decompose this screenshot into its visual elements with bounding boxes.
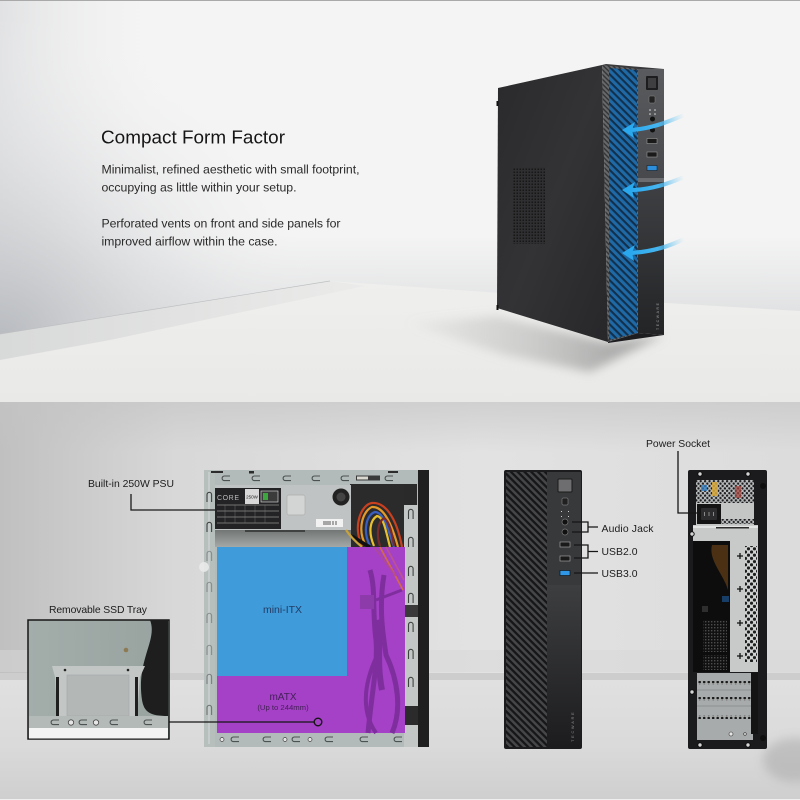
PSU spec label <box>215 488 281 529</box>
PSU barcode <box>316 519 343 527</box>
callout: USB3.0: USB3.0 <box>602 569 638 580</box>
paragraph: perforated vents: Perforated vents on front and side panels for <box>102 216 340 230</box>
corner screws <box>690 472 750 747</box>
metal frame <box>204 470 418 747</box>
mATX label <box>257 692 309 712</box>
case top edge <box>602 64 664 71</box>
open interior <box>693 541 730 672</box>
interior cables <box>711 545 728 590</box>
expansion slot panel <box>697 672 758 740</box>
tray bracket <box>52 666 145 716</box>
background: top room scene <box>0 0 800 402</box>
side panel edge <box>417 470 429 747</box>
callout: built-in PSU: Built-in 250W PSU <box>88 479 174 490</box>
front view of case <box>504 470 582 749</box>
dark cable behind tray <box>141 620 168 716</box>
front ports <box>646 76 658 170</box>
airflow arrow 3 <box>622 239 684 261</box>
rear frame <box>688 470 767 749</box>
thumb screws <box>760 483 766 489</box>
blue airflow highlight <box>609 68 637 340</box>
rear floor shadow <box>763 738 800 782</box>
power supply unit: CORE <box>217 495 239 502</box>
indicator dots <box>561 511 569 517</box>
callout: audio jack <box>572 522 654 535</box>
lower panel <box>547 585 581 748</box>
callout: power socket <box>646 439 710 513</box>
lower front panel <box>638 181 664 335</box>
mATX motherboard zone <box>217 547 405 733</box>
bottom rail hooks <box>220 737 402 742</box>
PSU lower plate <box>696 503 754 525</box>
silver body <box>693 525 758 672</box>
inset photo frame <box>28 620 169 739</box>
callout: USB2.0 <box>574 545 638 558</box>
SSD leader line <box>169 721 314 723</box>
open case interior <box>199 470 429 747</box>
brand mark: TECWARE <box>571 711 575 742</box>
PSU exhaust perforations <box>696 480 754 503</box>
background: bottom studio scene <box>0 402 800 800</box>
PSU cable bundle <box>346 503 402 547</box>
mini-ITX label: mini-ITX <box>263 604 302 616</box>
callout: USB2.0: USB2.0 <box>602 547 638 558</box>
vented front strip <box>602 65 638 342</box>
SSD tray label: Removable SSD Tray <box>49 605 148 616</box>
side panel <box>497 65 608 342</box>
callout: built-in PSU <box>88 479 215 510</box>
rear side perforations <box>745 546 757 662</box>
callout: USB3.0 <box>574 569 638 580</box>
feature text block <box>101 128 360 248</box>
rear cross marks <box>737 553 743 659</box>
brand mark: TECWARE <box>656 301 660 330</box>
tray screw <box>124 648 128 652</box>
upper port panel <box>638 69 664 179</box>
power button <box>558 479 572 492</box>
paragraph: minimalist aesthetic: Minimalist, refined aesthetic with small footprint, <box>102 162 360 176</box>
callout: audio jack: Audio Jack <box>602 524 654 535</box>
shadowed shelf under PSU <box>215 529 351 547</box>
power supply unit <box>215 485 351 530</box>
left rail hooks <box>199 492 212 715</box>
interior motherboard grids <box>702 606 727 670</box>
USB 3.0 port <box>560 570 570 576</box>
paragraph: minimalist aesthetic <box>102 162 360 194</box>
paragraph: minimalist aesthetic: occupying as little within your setup. <box>102 180 296 194</box>
removable SSD tray inset <box>28 605 322 739</box>
front body <box>504 470 582 749</box>
dark cable bay <box>350 484 406 548</box>
airflow arrow 1 <box>622 115 684 138</box>
audio jacks <box>562 519 568 535</box>
cables seen through purple zone <box>360 547 404 733</box>
striped vent <box>506 472 547 747</box>
wire colours behind exhaust <box>701 482 741 498</box>
mATX label: mATX <box>269 692 297 703</box>
upper panel <box>547 472 581 585</box>
paragraph: perforated vents: improved airflow within the case. <box>102 234 278 248</box>
rear view of case <box>688 470 800 782</box>
USB 2.0 ports <box>560 542 570 561</box>
PSU round sticker <box>332 488 350 506</box>
mATX label: (Up to 244mm) <box>257 703 309 712</box>
inset metal rail <box>29 716 168 733</box>
mini-ITX motherboard zone <box>217 547 347 676</box>
reset button <box>562 498 568 505</box>
right rail panels <box>404 484 418 747</box>
title: Compact Form Factor <box>101 128 285 148</box>
side panel feet <box>496 101 498 310</box>
PSU embossed square <box>287 495 305 515</box>
power supply unit: 250W <box>246 494 259 500</box>
case shadow <box>405 316 664 372</box>
power socket <box>697 504 721 524</box>
paragraph: perforated vents <box>102 216 340 248</box>
side vent <box>513 167 545 244</box>
compact case render with airflow <box>405 64 684 372</box>
callout: power socket: Power Socket <box>646 439 710 450</box>
airflow arrow 2 <box>622 177 684 198</box>
top rail hooks <box>211 471 398 481</box>
